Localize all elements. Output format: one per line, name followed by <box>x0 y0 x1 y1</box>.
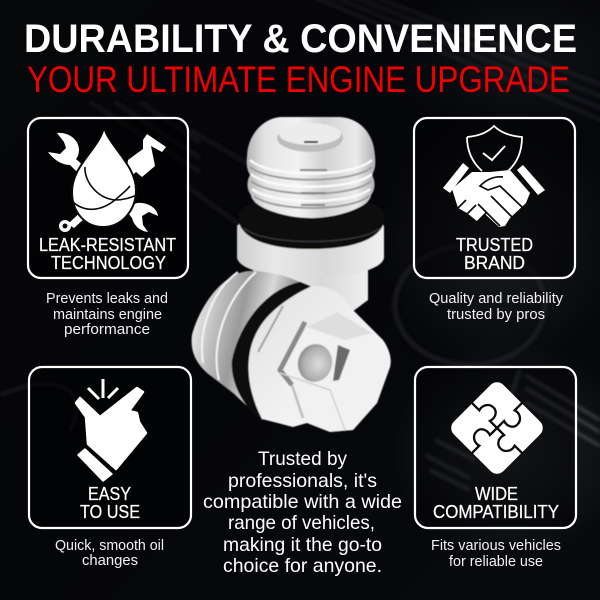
text: leak-resistant description <box>46 291 168 338</box>
text: central statement: Trusted by <box>258 448 347 470</box>
product: lower drain plug <box>192 271 391 432</box>
label: COMPATIBILITY <box>433 501 559 522</box>
panel: leak-resistant technology <box>28 118 188 278</box>
label: TRUSTED <box>456 234 533 255</box>
panel: wide compatibility <box>415 367 576 528</box>
text: wide compatibility description: for reliable use <box>449 554 543 570</box>
label: TECHNOLOGY <box>51 252 166 273</box>
text: central statement: choice for anyone. <box>223 555 382 577</box>
text: central statement: range of vehicles, <box>228 512 375 534</box>
text: wide compatibility description <box>431 538 561 570</box>
panel: easy to use <box>29 367 191 528</box>
text: easy to use description: changes <box>82 553 138 569</box>
text: central statement <box>203 448 402 577</box>
label <box>433 483 559 522</box>
text: leak-resistant description: performance <box>64 322 150 338</box>
icon: puzzle pieces <box>446 377 548 479</box>
label: TO USE <box>80 501 140 522</box>
text: trusted brand description: Quality and reliability <box>429 291 564 307</box>
text: trusted brand description: trusted by pros <box>447 307 545 323</box>
label: BRAND <box>464 252 525 273</box>
text: easy to use description <box>55 538 164 569</box>
text: leak-resistant description: Prevents leaks and <box>46 291 168 307</box>
text: wide compatibility description: Fits various vehicles <box>431 538 561 554</box>
text: leak-resistant description: maintains engine <box>53 307 162 323</box>
icon: shield and handshake <box>443 126 545 227</box>
label: EASY <box>88 483 131 504</box>
icon: snapping hand <box>76 379 146 481</box>
icon: oil drop with wrenches <box>48 127 166 232</box>
text: central statement: compatible with a wide <box>203 491 402 513</box>
title: DURABILITY & CONVENIENCE <box>24 17 577 61</box>
text: central statement: making it the go-to <box>223 534 382 556</box>
label <box>80 483 140 522</box>
text: trusted brand description <box>429 291 564 323</box>
label: LEAK-RESISTANT <box>39 234 176 255</box>
panel: trusted brand <box>414 118 575 278</box>
label <box>39 234 176 273</box>
text: easy to use description: Quick, smooth oil <box>55 538 164 554</box>
product: upper drain plug <box>237 117 385 312</box>
label <box>456 234 533 273</box>
label: WIDE <box>475 483 518 504</box>
text: central statement: professionals, it's <box>228 470 377 492</box>
